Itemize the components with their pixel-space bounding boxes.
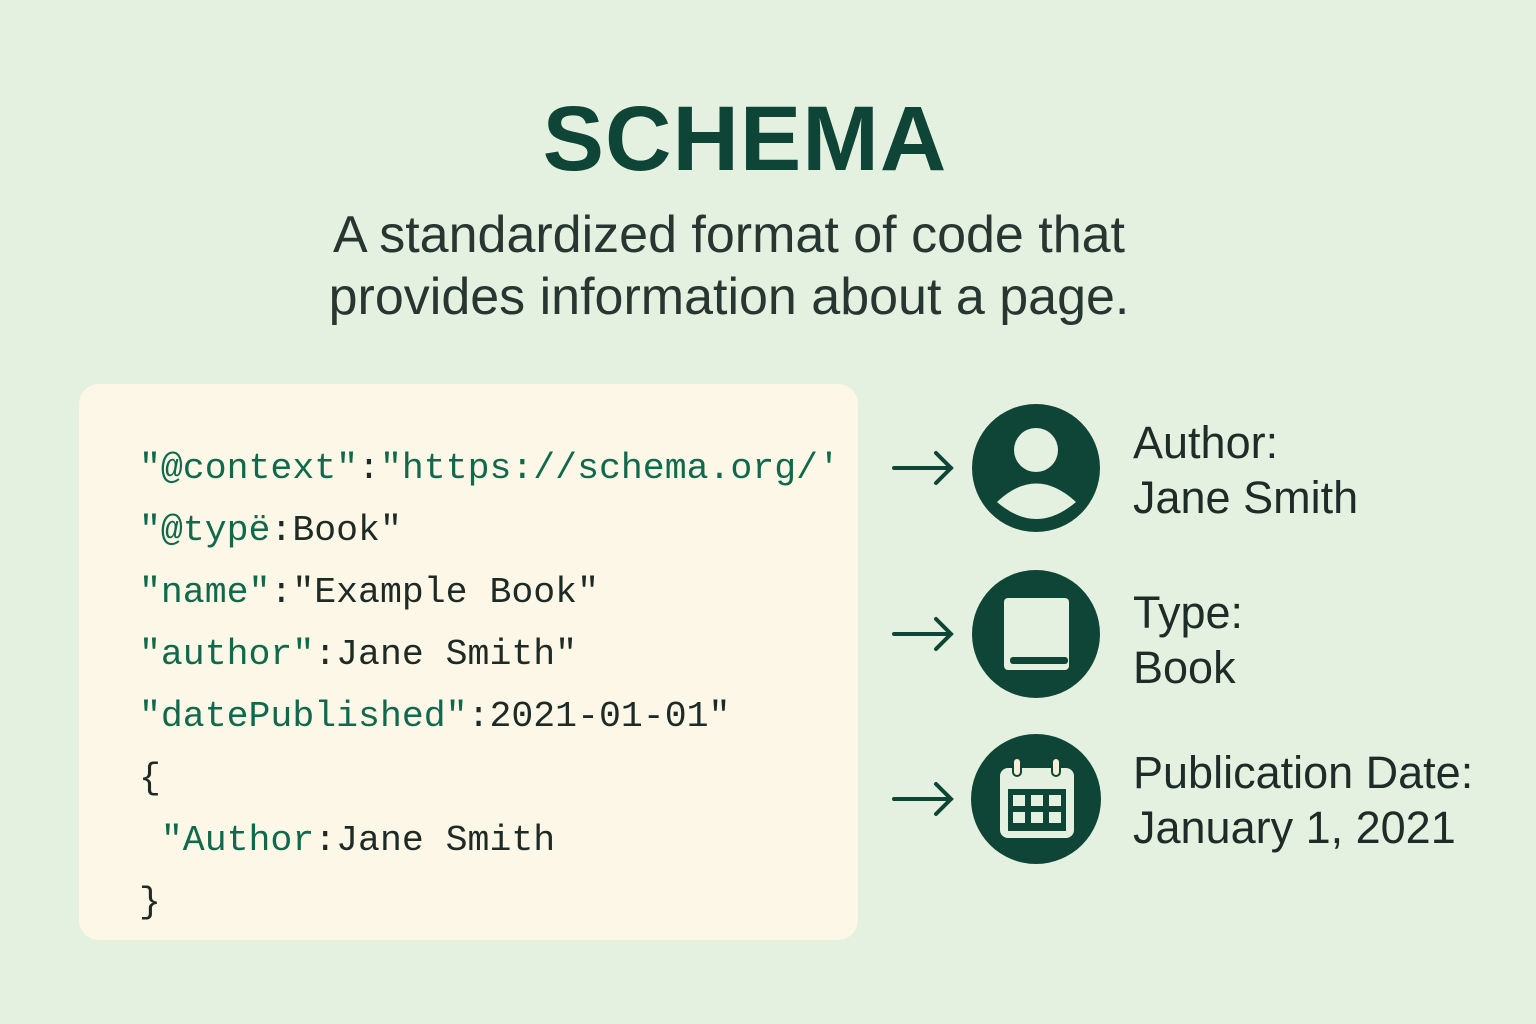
label: author [1133,417,1358,523]
icon: book [972,570,1100,698]
label: type: Type: [1133,587,1243,638]
label: author: Jane Smith [1133,472,1358,523]
panel: code [79,384,858,940]
arrow: author [894,453,951,483]
label: publication date: January 1, 2021 [1133,802,1456,853]
subtitle: A standardized format of code that [333,206,1125,264]
label: type: Book [1133,642,1236,693]
code block: "@context":"https://schema.org/' "@typë:Book" "name":"Example Book" "author":Jane Smith" "datePublished":2021-01-01" { "Author:Jane Smith } [139,448,840,923]
subtitle [329,206,1129,326]
label: type [1133,587,1243,693]
arrow: type [894,619,951,649]
label: publication date [1133,747,1473,853]
arrow: date [894,784,951,814]
label: publication date: Publication Date: [1133,747,1473,798]
icon: person [972,404,1100,532]
subtitle: provides information about a page. [329,268,1129,326]
label: author: Author: [1133,417,1278,468]
icon: calendar [971,734,1101,864]
title: SCHEMA [543,88,947,190]
